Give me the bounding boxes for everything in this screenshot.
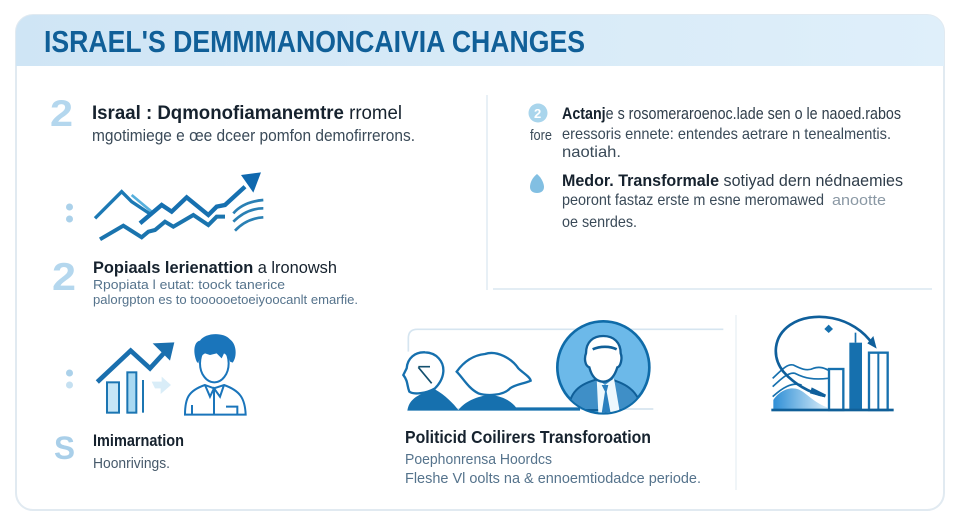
paragraph 2 line 2: peoront fastaz erste m esne meromawed: [562, 192, 824, 209]
right column text: [528, 104, 903, 231]
section 4 body line 1: Poephonrensa Hoordcs: [405, 452, 552, 468]
icon: skyline with curved arrow: [771, 317, 894, 411]
title: ISRAEL'S DEMMMANONCAIVIA CHANGES: [44, 24, 585, 59]
section 4 body line 2: Fleshe Vl oolts na & ennoemtiodadce periode.: [405, 471, 701, 487]
icon: political leaders: [403, 321, 723, 413]
paragraph 1 line 2: eressoris ennete: entendes aetrare n tenealmentis.: [562, 126, 891, 143]
badge 2: [528, 104, 548, 122]
section 2 heading: Popiaals lerienattion a lronowsh: [93, 259, 337, 277]
dots: [66, 204, 73, 222]
section 2 body line 2: palorgpton es to toooooetoeiyoocanlt emarfie.: [93, 292, 358, 307]
section 3 text: [54, 430, 184, 472]
badge glyph: 2: [534, 106, 541, 121]
dots: [66, 370, 73, 388]
paragraph 1 line 1: Actanje s rosomeraroenoc.lade sen o le naoed.rabos: [562, 105, 901, 123]
section 4 heading: Politicid Coilirers Transforoation: [405, 427, 651, 447]
section 2 text: [52, 256, 358, 307]
number 2: 2: [50, 93, 73, 134]
paragraph 1 line 3: naotiah.: [562, 144, 621, 161]
badge drop: [530, 174, 544, 193]
section 1 text: [50, 93, 415, 145]
section 3 heading: Imimarnation: [93, 431, 184, 450]
icon: mountain trend chart: [95, 172, 263, 239]
paragraph 2 line 1: Medor. Transformale sotiyad dern nédnaemies: [562, 171, 903, 190]
number S: S: [54, 430, 75, 466]
section 1 body: mgotimiege e œe dceer pomfon demofirrerons.: [92, 127, 415, 145]
section 2 body line 1: Rpopiata l eutat: toock tanerice: [93, 277, 285, 292]
section 4 text: [405, 427, 701, 487]
paragraph 2 line 3: oe senrdes.: [562, 214, 637, 231]
icon: growth bars and person: [97, 334, 246, 415]
section 1 heading: Israal : Dqmonofiamanemtre rromel: [92, 103, 402, 124]
paragraph 1 margin word: fore: [530, 127, 552, 144]
section 3 body: Hoonrivings.: [93, 455, 170, 472]
paragraph 2 faded word: anootte: [832, 192, 886, 209]
number 2: 2: [52, 256, 76, 299]
header band: [16, 15, 944, 66]
